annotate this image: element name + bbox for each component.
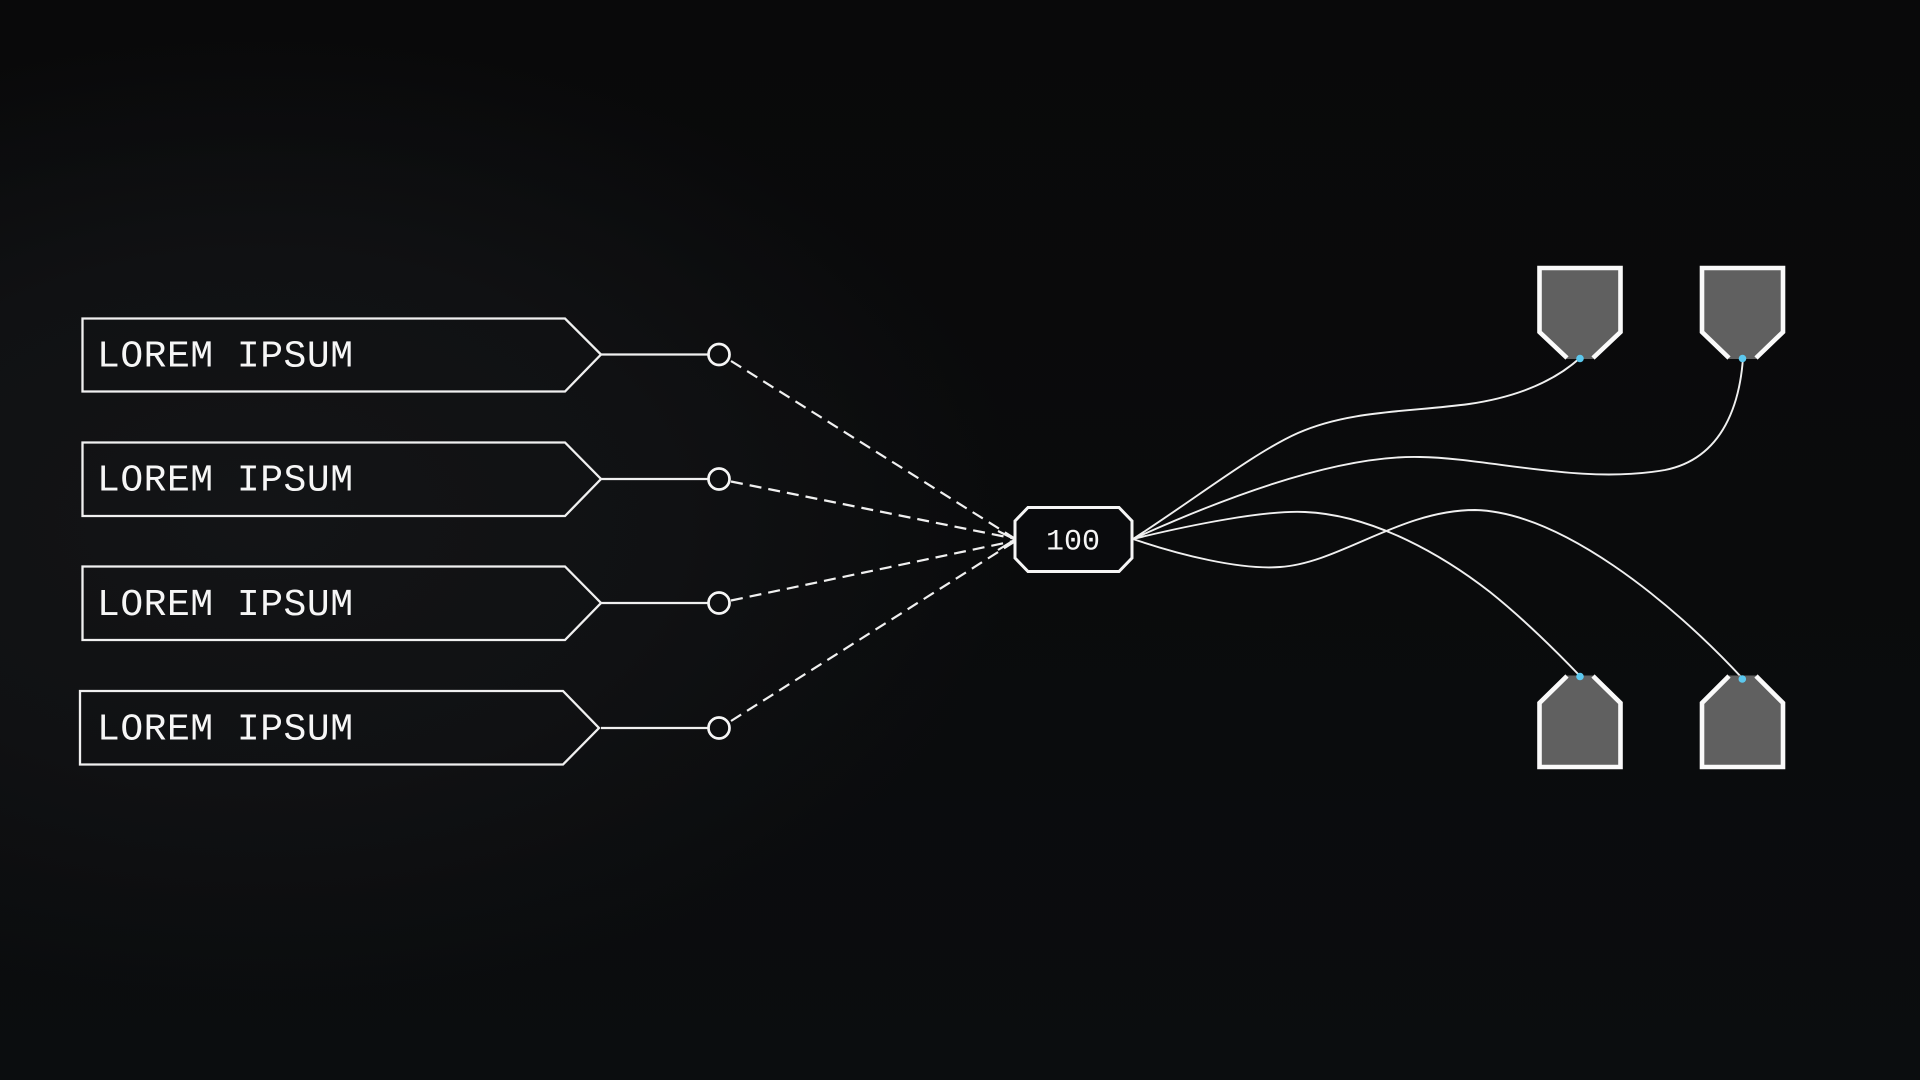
curve to bottom left shield	[1133, 512, 1580, 676]
label box 2	[82, 442, 601, 516]
shield fill	[1540, 676, 1620, 767]
input row 4	[80, 542, 1014, 764]
input row 1	[82, 318, 1014, 538]
label text 2: LOREM IPSUM	[97, 460, 353, 502]
arrowhead into hub	[998, 531, 1015, 550]
shield bottom left	[1540, 673, 1620, 767]
connection dot	[1738, 675, 1746, 683]
node 1	[708, 344, 730, 365]
shield outline	[1702, 676, 1783, 767]
label text 1: LOREM IPSUM	[97, 336, 353, 378]
input row 2	[82, 442, 1014, 538]
label box 4	[80, 691, 599, 764]
label box 3	[82, 566, 601, 640]
node 4	[708, 718, 730, 738]
shield fill	[1540, 268, 1620, 359]
output curves	[1133, 358, 1743, 679]
shield outline	[1702, 268, 1783, 358]
shield outline	[1540, 676, 1620, 767]
connection dot	[1739, 355, 1746, 362]
label box 1	[82, 318, 601, 392]
input row 3	[82, 541, 1014, 640]
connector 4	[601, 727, 708, 729]
shield bottom right	[1702, 675, 1783, 767]
shield outline	[1540, 268, 1620, 358]
label text 4: LOREM IPSUM	[97, 708, 353, 752]
connection dot	[1576, 355, 1584, 362]
dashed link 1	[731, 361, 1014, 538]
dashed link 4	[731, 542, 1014, 721]
dashed link 2	[731, 482, 1014, 538]
shield fill	[1702, 268, 1783, 359]
node 3	[708, 592, 730, 614]
connection dot	[1576, 673, 1584, 680]
shield fill	[1702, 676, 1783, 767]
curve to top left shield	[1133, 358, 1580, 539]
connector 2	[601, 478, 708, 480]
hub octagon	[1015, 508, 1132, 572]
dashed link 3	[731, 541, 1014, 600]
label text 3: LOREM IPSUM	[97, 584, 353, 627]
central hub	[1015, 508, 1132, 572]
node 2	[708, 468, 730, 490]
connector 3	[601, 602, 708, 604]
shield top left	[1540, 268, 1620, 362]
connector 1	[601, 353, 708, 356]
curve to top right shield	[1133, 358, 1743, 539]
shield top right	[1702, 268, 1783, 362]
curve to bottom right shield	[1133, 510, 1743, 679]
hub value: 100	[1046, 526, 1100, 560]
